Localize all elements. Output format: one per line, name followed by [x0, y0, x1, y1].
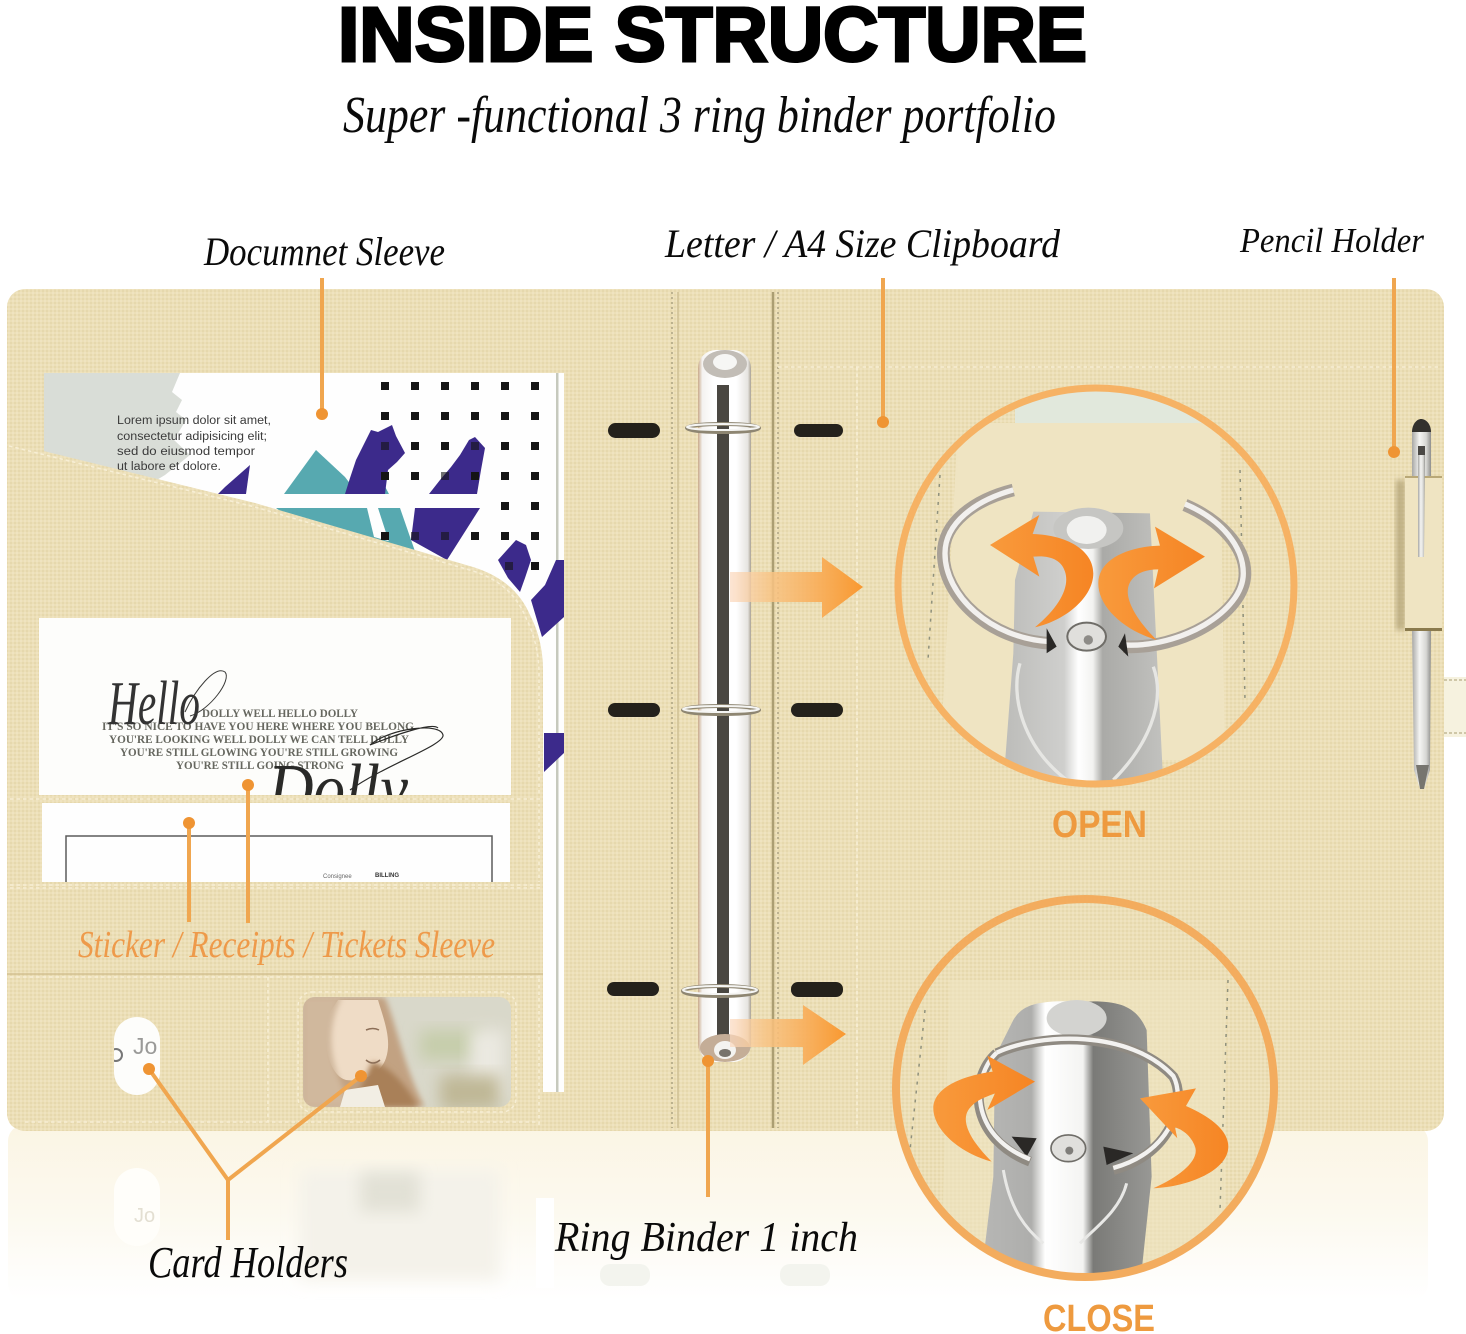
bar end cap top: [703, 350, 747, 378]
punched slots: [607, 423, 843, 997]
arrow: top ring to open detail: [730, 557, 863, 618]
dot grid: [381, 382, 539, 570]
closed screw: [1051, 1135, 1086, 1162]
ring bottom: [683, 986, 757, 996]
left front pocket with curved flap: [7, 442, 543, 1130]
card verse text: YOU'RE STILL GLOWING YOU'RE STILL GROWING: [120, 747, 398, 759]
label: card holders: Card Holders: [148, 1238, 348, 1287]
lorem ipsum text: ut labore et dolore.: [117, 461, 221, 473]
teal paint shapes: [276, 450, 414, 550]
close arrow left: [933, 1056, 1035, 1162]
bar centre strip: [717, 385, 729, 1035]
open label: OPEN: [1052, 804, 1147, 846]
closed ring: [979, 1039, 1178, 1170]
lorem ipsum text: [117, 415, 271, 473]
rivet: [1053, 508, 1123, 549]
receipt slip: BILLING: [375, 873, 399, 879]
card holder pocket: [10, 977, 540, 1122]
lorem ipsum text: Lorem ipsum dolor sit amet,: [117, 415, 271, 427]
label: document sleeve: Documnet Sleeve: [203, 229, 445, 274]
ring middle: [683, 706, 759, 714]
closed rivet: [1047, 1000, 1107, 1037]
card verse text: [102, 708, 414, 772]
card verse text: IT'S SO NICE TO HAVE YOU HERE WHERE YOU BELONG: [102, 721, 414, 733]
open arrow left: [990, 515, 1093, 627]
bar end cap bottom: [700, 1034, 750, 1062]
label: sticker receipts tickets sleeve: Sticker / Receipts / Tickets Sleeve: [78, 924, 495, 966]
photo window: [298, 992, 516, 1112]
leader: document sleeve: [316, 278, 328, 420]
pen barrel: [1412, 630, 1431, 789]
pen loop: [1396, 476, 1442, 631]
sticker receipts tickets sleeve: [7, 882, 543, 975]
reflection under binder: Jo: [134, 1205, 155, 1227]
leader: card holders: [143, 1063, 367, 1240]
hello card: [39, 618, 511, 795]
subtitle: Super -functional 3 ring binder portfolio: [343, 87, 1056, 144]
leader: ring binder: [702, 1055, 714, 1197]
card verse text: YOU'RE STILL GOING STRONG: [176, 760, 344, 772]
script Dolly: Dolly: [267, 751, 409, 828]
face: [326, 1000, 388, 1080]
script Hello: Hello: [107, 670, 200, 738]
open ring detail circle: [898, 388, 1294, 785]
label: clipboard: Letter / A4 Size Clipboard: [664, 221, 1061, 266]
oval card window: [110, 1017, 160, 1095]
leader: sticker: [183, 817, 195, 922]
leader: receipts: [242, 779, 254, 923]
receipt slip: [42, 803, 510, 882]
screw: [1067, 623, 1106, 651]
purple paint shapes: [218, 425, 564, 772]
open arrow right: [1098, 527, 1205, 640]
back hair: [303, 997, 425, 1107]
label: pencil holder: Pencil Holder: [1239, 221, 1424, 260]
open ring right half: [1123, 504, 1245, 647]
arrow: bottom ring to close detail: [730, 1005, 846, 1065]
script Hello: [108, 670, 227, 724]
leader: clipboard: [877, 278, 889, 428]
pen tip and cap: [1412, 419, 1431, 478]
metal plate: [1003, 512, 1163, 785]
card verse text: DOLLY WELL HELLO DOLLY: [202, 708, 359, 720]
pen clip: [1418, 455, 1425, 557]
pocket band under hello card: [7, 795, 543, 804]
receipt slip: Consignee: [323, 874, 352, 880]
reflection under binder: [8, 1125, 1428, 1300]
closed metal plate: [980, 1001, 1152, 1287]
rings: binder spine with three rings: [683, 350, 759, 1062]
pen holder with stylus pen: [1396, 419, 1442, 789]
lorem ipsum text: sed do eiusmod tempor: [117, 446, 255, 458]
ring top: [687, 424, 759, 432]
open ring left half: [943, 490, 1050, 643]
leader: pencil holder: [1388, 278, 1400, 458]
closed ring detail circle: [896, 899, 1274, 1290]
lorem ipsum text: consectetur adipisicing elit;: [117, 431, 267, 443]
binder clasp: [1440, 677, 1466, 737]
label: ring binder: Ring Binder 1 inch: [554, 1215, 858, 1261]
document sheet: [44, 373, 564, 1092]
close arrow right: [1140, 1088, 1228, 1188]
ring bar: [698, 350, 751, 1062]
script Dolly: [274, 726, 444, 795]
oval card window: Jo: [133, 1033, 157, 1059]
binder inner cover: [7, 289, 1444, 1131]
card verse text: YOU'RE LOOKING WELL DOLLY WE CAN TELL DOLLY: [109, 734, 410, 746]
